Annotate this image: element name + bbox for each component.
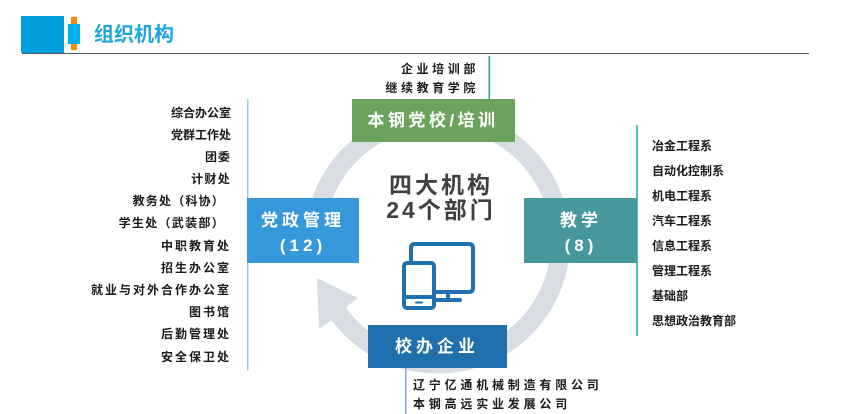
box: 本钢党校/培训 <box>352 99 515 142</box>
icon: monitor and phone <box>404 244 473 308</box>
list: teaching departments: 基础部 <box>652 288 688 303</box>
header blue block <box>21 16 64 53</box>
box: 教学: (8) <box>565 236 597 255</box>
list: school enterprises: 本钢高远实业发展公司 <box>413 396 571 411</box>
list: school enterprises <box>413 377 603 411</box>
box: 党政管理: 党政管理 <box>261 210 345 230</box>
list: teaching departments: 冶金工程系 <box>652 138 712 153</box>
box: 校办企业 <box>368 325 507 368</box>
list: administrative departments: 就业与对外合作办公室 <box>91 282 231 297</box>
header bar <box>21 16 809 54</box>
list: administrative departments: 教务处（科协） <box>133 193 225 208</box>
list: administrative departments: 安全保卫处 <box>161 349 231 364</box>
list: administrative departments: 综合办公室 <box>171 105 231 120</box>
box: 本钢党校/培训: 本钢党校/培训 <box>367 110 499 130</box>
list: administrative departments <box>91 105 231 364</box>
list: administrative departments: 招生办公室 <box>161 260 231 275</box>
box: 党政管理 <box>247 198 359 263</box>
list: top units: 继续教育学院 <box>385 80 479 95</box>
cycle ring arrow <box>315 118 561 364</box>
center heading: 四大机构 <box>389 172 493 198</box>
connector: left list line <box>247 99 248 370</box>
list: administrative departments: 图书馆 <box>189 304 231 319</box>
list: administrative departments: 中职教育处 <box>161 238 231 253</box>
title: 组织机构 <box>94 23 174 46</box>
center heading: 24个部门 <box>386 197 496 223</box>
connector: top list line <box>488 56 490 99</box>
list: teaching departments: 自动化控制系 <box>652 163 724 178</box>
list: teaching departments: 机电工程系 <box>652 188 712 203</box>
box: 教学 <box>524 198 637 263</box>
header cyan accent <box>68 24 80 44</box>
list: teaching departments: 汽车工程系 <box>652 213 712 228</box>
list: administrative departments: 党群工作处 <box>171 127 231 142</box>
box: 党政管理: (12) <box>280 236 326 255</box>
list: top units: 企业培训部 <box>401 61 479 76</box>
box: 校办企业: 校办企业 <box>395 336 479 356</box>
list: administrative departments: 后勤管理处 <box>161 326 231 341</box>
header rule <box>22 53 809 54</box>
list: teaching departments: 管理工程系 <box>652 263 712 278</box>
header orange accent <box>71 17 77 50</box>
list: top units <box>385 61 479 95</box>
list: school enterprises: 辽宁亿通机械制造有限公司 <box>413 377 603 392</box>
list: teaching departments <box>652 138 736 328</box>
list: teaching departments: 思想政治教育部 <box>652 313 736 328</box>
connector: right list line <box>636 125 638 336</box>
list: teaching departments: 信息工程系 <box>652 238 712 253</box>
box: 教学: 教学 <box>560 210 602 230</box>
list: administrative departments: 学生处（武装部） <box>119 215 225 230</box>
center heading <box>386 172 496 223</box>
list: administrative departments: 团委 <box>205 150 231 164</box>
connector: bottom list line <box>405 368 406 414</box>
list: administrative departments: 计财处 <box>191 171 231 186</box>
